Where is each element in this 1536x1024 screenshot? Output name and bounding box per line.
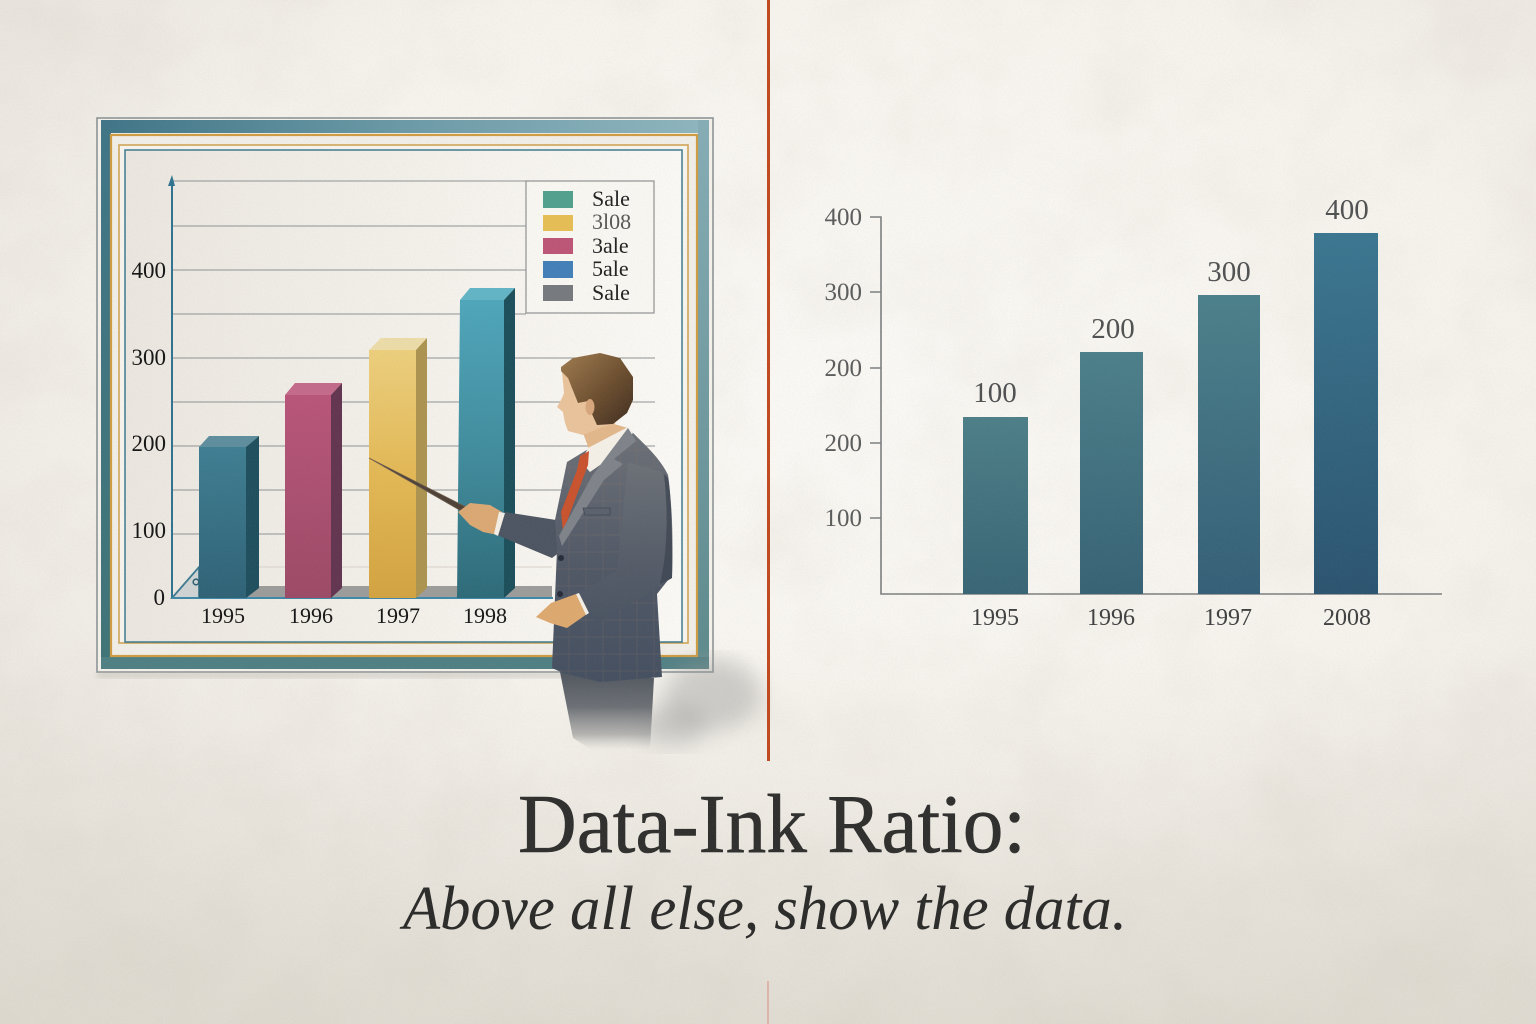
minimalist y labels: 200: [824, 430, 862, 457]
bar value labels: 100: [973, 377, 1017, 409]
x axis year labels, decorated chart: 1997: [376, 603, 420, 628]
presenter figure: [369, 353, 673, 750]
vertical divider line: [767, 0, 770, 1024]
pointer stick: [369, 458, 466, 512]
legend labels: 3ale: [592, 233, 629, 258]
legend labels: 3l08: [592, 209, 631, 234]
breast pocket: [583, 508, 610, 515]
title: Data-Ink Ratio:: [518, 778, 1026, 871]
y axis labels, decorated chart: 300: [132, 345, 166, 370]
sleeve: [578, 462, 672, 624]
gridlines: [172, 181, 655, 534]
legend labels: Sale: [592, 280, 630, 305]
minimalist year labels: 1996: [1087, 605, 1135, 631]
jacket buttons: [557, 555, 564, 597]
floor of 3D chart: [172, 567, 552, 598]
head: [557, 353, 633, 435]
legend swatches: [543, 191, 573, 301]
subtitle: Above all else, show the data.: [399, 875, 1127, 943]
lapel: [559, 428, 636, 546]
y axis labels, decorated chart: 100: [132, 518, 166, 543]
bar value labels: 400: [1325, 194, 1369, 226]
minimalist y labels: 200: [824, 355, 862, 382]
minimalist y labels: [824, 204, 862, 532]
bar 1997, 3D: [369, 338, 427, 598]
shirt collar: [581, 427, 633, 472]
y axis with arrow: [168, 175, 175, 598]
panel: minimalist chart: [824, 194, 1442, 631]
bar 1995, 3D: [199, 436, 259, 598]
x axis year labels, decorated chart: [201, 603, 507, 628]
trousers: [560, 672, 654, 750]
minimalist year labels: 1995: [971, 605, 1019, 631]
legend box: [526, 181, 654, 313]
y axis labels, decorated chart: 400: [132, 258, 166, 283]
neck: [583, 424, 628, 452]
sleeve shading: [660, 474, 673, 584]
x axis: [172, 597, 553, 599]
bar value labels: 300: [1207, 256, 1251, 288]
minimalist year labels: 1997: [1204, 605, 1252, 631]
bar value labels: [973, 194, 1369, 409]
y axis labels, decorated chart: 0: [154, 585, 165, 610]
minimalist bars: [963, 233, 1378, 594]
minimalist axes: [870, 217, 1442, 594]
necktie: [561, 451, 589, 532]
minimalist year labels: [971, 605, 1371, 631]
minimalist year labels: 2008: [1323, 605, 1371, 631]
minimalist y labels: 400: [824, 204, 862, 231]
minimalist y labels: 300: [824, 279, 862, 306]
x axis year labels, decorated chart: 1996: [289, 603, 333, 628]
legend labels: [592, 186, 631, 305]
jacket: [552, 428, 672, 682]
y axis labels, decorated chart: [132, 258, 166, 610]
legend labels: 5ale: [592, 256, 629, 281]
minimalist y labels: 100: [824, 505, 862, 532]
legend labels: Sale: [592, 186, 630, 211]
bar value labels: 200: [1091, 313, 1135, 345]
panel: cluttered chart frame: [97, 118, 713, 678]
pointing hand: [458, 503, 505, 536]
lower hand: [536, 593, 589, 628]
bar 1996, 3D: [285, 383, 342, 598]
pointing arm: [497, 512, 560, 558]
smudge shadow under presenter: [638, 659, 760, 745]
y axis labels, decorated chart: 200: [132, 431, 166, 456]
bar 1998, 3D: [457, 288, 515, 598]
x axis year labels, decorated chart: 1995: [201, 603, 245, 628]
x axis year labels, decorated chart: 1998: [463, 603, 507, 628]
